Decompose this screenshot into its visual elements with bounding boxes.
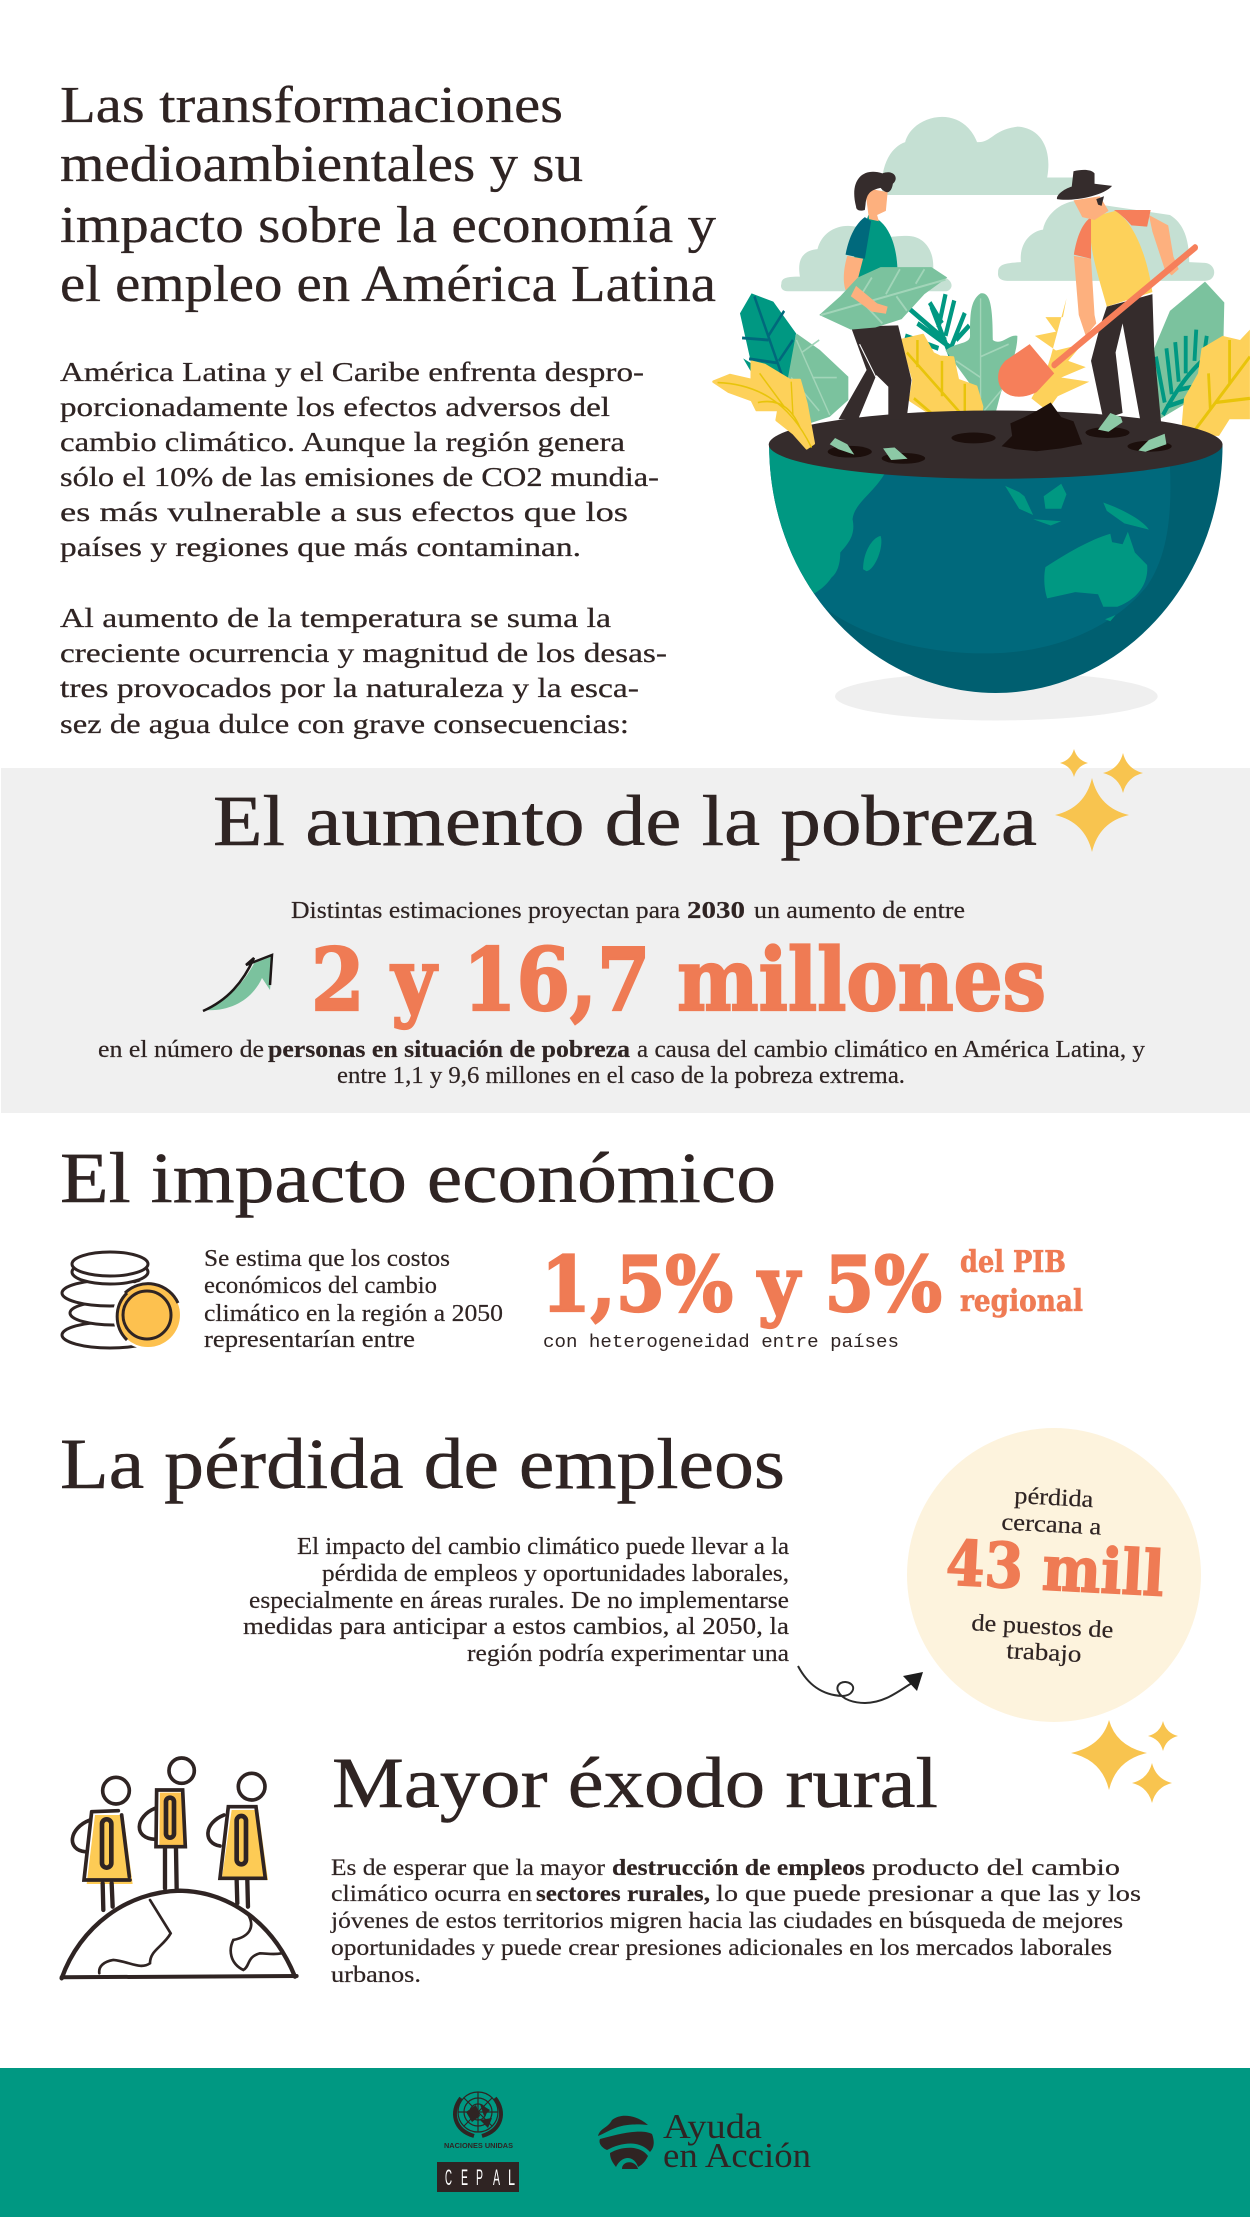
- poverty lead text: [291, 898, 965, 924]
- rural text: climático ocurra en: [331, 1881, 533, 1906]
- callout circle: 43 mill: 43 mill: [944, 1526, 1166, 1611]
- callout circle: 43 mill: cercana a: [1001, 1509, 1102, 1541]
- job loss text: pérdida de empleos y oportunidades laborales,: [322, 1561, 789, 1587]
- logo: Naciones Unidas CEPAL: A: [493, 2165, 500, 2190]
- job loss text: [243, 1534, 789, 1667]
- logo: Ayuda en Acción: [598, 2107, 811, 2175]
- poverty lead text: 2030: [687, 898, 745, 924]
- clouds: [781, 117, 1214, 291]
- big number: 1,5% y 5%: 1,5% y 5%: [541, 1240, 942, 1329]
- cost text: Se estima que los costos: [204, 1246, 450, 1272]
- cost text: [204, 1246, 503, 1353]
- cost text: representarían entre: [204, 1327, 415, 1353]
- label: del PIB regional: regional: [960, 1284, 1083, 1319]
- heading: job loss: La pérdida de empleos: [60, 1424, 785, 1504]
- globe: [767, 440, 1226, 698]
- poverty detail text: [98, 1037, 1145, 1089]
- logo: Naciones Unidas CEPAL: C: [445, 2165, 452, 2190]
- callout circle: 43 mill: [907, 1428, 1201, 1722]
- intro paragraph 1: América Latina y el Caribe enfrenta despro-: [60, 357, 644, 387]
- front left leaf: [713, 362, 814, 448]
- logo: Naciones Unidas CEPAL: E: [461, 2165, 468, 2190]
- rural text: urbanos.: [331, 1962, 421, 1987]
- title: [60, 77, 716, 313]
- heading: poverty: El aumento de la pobreza: [213, 781, 1037, 861]
- footer band: [0, 2068, 1250, 2217]
- poverty detail text: personas en situación de pobreza: [268, 1037, 630, 1063]
- intro paragraph 2: tres provocados por la naturaleza y la esca-: [60, 673, 639, 703]
- poverty lead text: un aumento de entre: [754, 898, 965, 924]
- rural text: jóvenes de estos territorios migren hacia las ciudades en búsqueda de mejores: [330, 1908, 1123, 1933]
- callout circle: 43 mill: pérdida: [1014, 1483, 1094, 1513]
- label: del PIB regional: [960, 1245, 1083, 1319]
- illustration: people planting on half globe: [713, 117, 1250, 720]
- job loss text: medidas para anticipar a estos cambios, al 2050, la: [243, 1614, 789, 1640]
- note: heterogeneity: con heterogeneidad entre países: [543, 1333, 899, 1353]
- rural text: oportunidades y puede crear presiones adicionales en los mercados laborales: [331, 1935, 1112, 1960]
- intro paragraph 1: porcionadamente los efectos adversos del: [60, 392, 610, 422]
- arrow to circle: [798, 1666, 923, 1703]
- rural text: [330, 1855, 1141, 1987]
- logo: Naciones Unidas CEPAL: P: [476, 2165, 483, 2190]
- person right with shovel: [998, 170, 1195, 452]
- job loss text: especialmente en áreas rurales. De no implementarse: [249, 1588, 789, 1614]
- title: impacto sobre la economía y: [60, 197, 716, 254]
- intro paragraph 1: es más vulnerable a sus efectos que los: [60, 497, 628, 527]
- title: el empleo en América Latina: [60, 256, 716, 313]
- poverty detail text: en el número de: [98, 1037, 264, 1063]
- intro paragraph 1: cambio climático. Aunque la región genera: [60, 427, 625, 457]
- icon: rising arrow: [203, 955, 273, 1011]
- intro paragraph 2: sez de agua dulce con grave consecuencias:: [60, 709, 629, 739]
- panel: poverty band: [1, 768, 1250, 1113]
- intro paragraph 1: sólo el 10% de las emisiones de CO2 mundia-: [60, 462, 659, 492]
- big number: 2 y 16,7 millones: 2 y 16,7 millones: [311, 930, 1046, 1031]
- planting holes: [828, 403, 1172, 464]
- plants behind: [785, 333, 848, 423]
- rural text: sectores rurales,: [536, 1881, 710, 1906]
- rural text: destrucción de empleos: [612, 1855, 865, 1880]
- callout circle: 43 mill: trabajo: [1006, 1638, 1082, 1668]
- job loss text: El impacto del cambio climático puede llevar a la: [297, 1534, 789, 1560]
- heading: rural exodus: Mayor éxodo rural: [332, 1743, 938, 1823]
- label: del PIB regional: del PIB: [960, 1245, 1066, 1280]
- soil disc: [769, 410, 1223, 479]
- poverty lead text: Distintas estimaciones proyectan para: [291, 898, 680, 924]
- intro paragraph 2: creciente ocurrencia y magnitud de los desas-: [60, 638, 667, 668]
- poverty detail text: a causa del cambio climático en América Latina, y: [637, 1037, 1145, 1063]
- person left: [819, 172, 947, 460]
- intro paragraph 1: [60, 357, 659, 562]
- icon: people on globe: [62, 1758, 297, 1978]
- sparkles top: [1055, 749, 1143, 852]
- rural text: Es de esperar que la mayor: [331, 1855, 605, 1880]
- intro paragraph 1: países y regiones que más contaminan.: [60, 532, 581, 562]
- rural text: lo que puede presionar a que las y los: [716, 1881, 1141, 1906]
- title: Las transformaciones: [60, 77, 563, 134]
- ground shadow: [835, 672, 1158, 720]
- title: medioambientales y su: [60, 136, 583, 193]
- sparkles bottom: [1071, 1720, 1178, 1803]
- logo: Naciones Unidas CEPAL: L: [508, 2165, 515, 2190]
- logo: Ayuda en Acción: Ayuda: [663, 2107, 762, 2146]
- cost text: climático en la región a 2050: [204, 1301, 503, 1327]
- poverty detail text: entre 1,1 y 9,6 millones en el caso de la pobreza extrema.: [337, 1063, 905, 1089]
- rural text: producto del cambio: [872, 1855, 1120, 1880]
- intro paragraph 2: Al aumento de la temperatura se suma la: [60, 603, 611, 633]
- logo: Naciones Unidas CEPAL: [437, 2092, 519, 2192]
- job loss text: región podría experimentar una: [467, 1641, 789, 1667]
- heading: economic impact: El impacto económico: [60, 1138, 776, 1218]
- callout circle: 43 mill: de puestos de: [971, 1610, 1114, 1644]
- logo: Naciones Unidas CEPAL: NACIONES UNIDAS: [444, 2143, 513, 2150]
- intro paragraph 2: [60, 603, 667, 739]
- cost text: económicos del cambio: [204, 1273, 437, 1299]
- icon: coins: [62, 1252, 181, 1349]
- logo: Ayuda en Acción: en Acción: [663, 2136, 811, 2175]
